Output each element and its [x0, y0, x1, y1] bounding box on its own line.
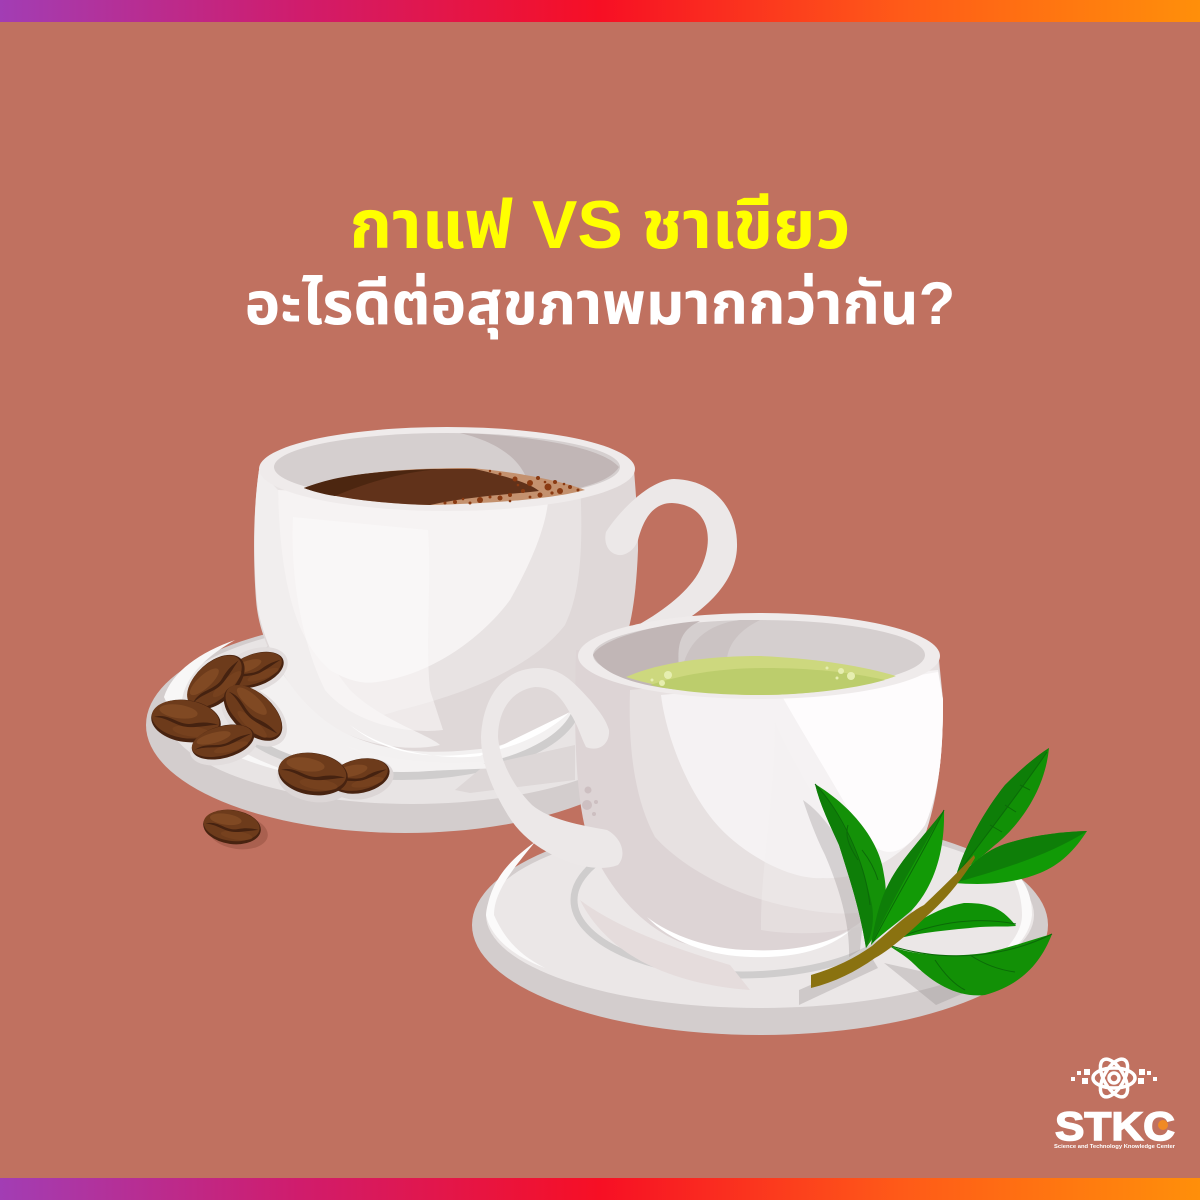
leaf 6: [888, 934, 1052, 995]
subtitle: อะไรดีต่อสุขภาพมากกว่ากัน?: [245, 270, 955, 340]
leaf 1: [815, 784, 886, 948]
title: กาแฟ VS ชาเขียว: [350, 187, 850, 263]
leaf 4: [954, 831, 1087, 884]
tea branch with leaves: [811, 748, 1087, 995]
tea cup body: [575, 650, 943, 957]
tea cup rim: [578, 613, 940, 699]
coffee cup with saucer: [146, 427, 737, 833]
green tea cup with saucer: [472, 613, 1048, 1035]
coffee saucer: [146, 617, 664, 833]
coffee cup body: [254, 470, 638, 772]
leaf 5: [893, 903, 1016, 940]
bottom gradient bar: [0, 1178, 1200, 1200]
logo icon: [1071, 1055, 1157, 1101]
coffee liquid: [304, 468, 585, 505]
logo dot: [1158, 1120, 1168, 1130]
tea cup handle: [481, 668, 622, 868]
stem: [811, 855, 975, 988]
coffee cup handle: [605, 479, 737, 632]
leaf 2: [871, 810, 944, 945]
logo tagline: Science and Technology Knowledge Center: [1054, 1144, 1176, 1150]
green tea liquid: [626, 656, 896, 695]
logo wordmark: STKC: [1055, 1105, 1175, 1149]
tea saucer: [472, 815, 1048, 1035]
coffee cup rim: [259, 427, 635, 511]
loose coffee bean: [201, 806, 270, 853]
leaf 3: [956, 748, 1049, 876]
coffee beans on saucer: [148, 639, 397, 807]
STKC logo: [1054, 1055, 1176, 1150]
top gradient bar: [0, 0, 1200, 22]
tea leaf shadows: [799, 800, 964, 1005]
